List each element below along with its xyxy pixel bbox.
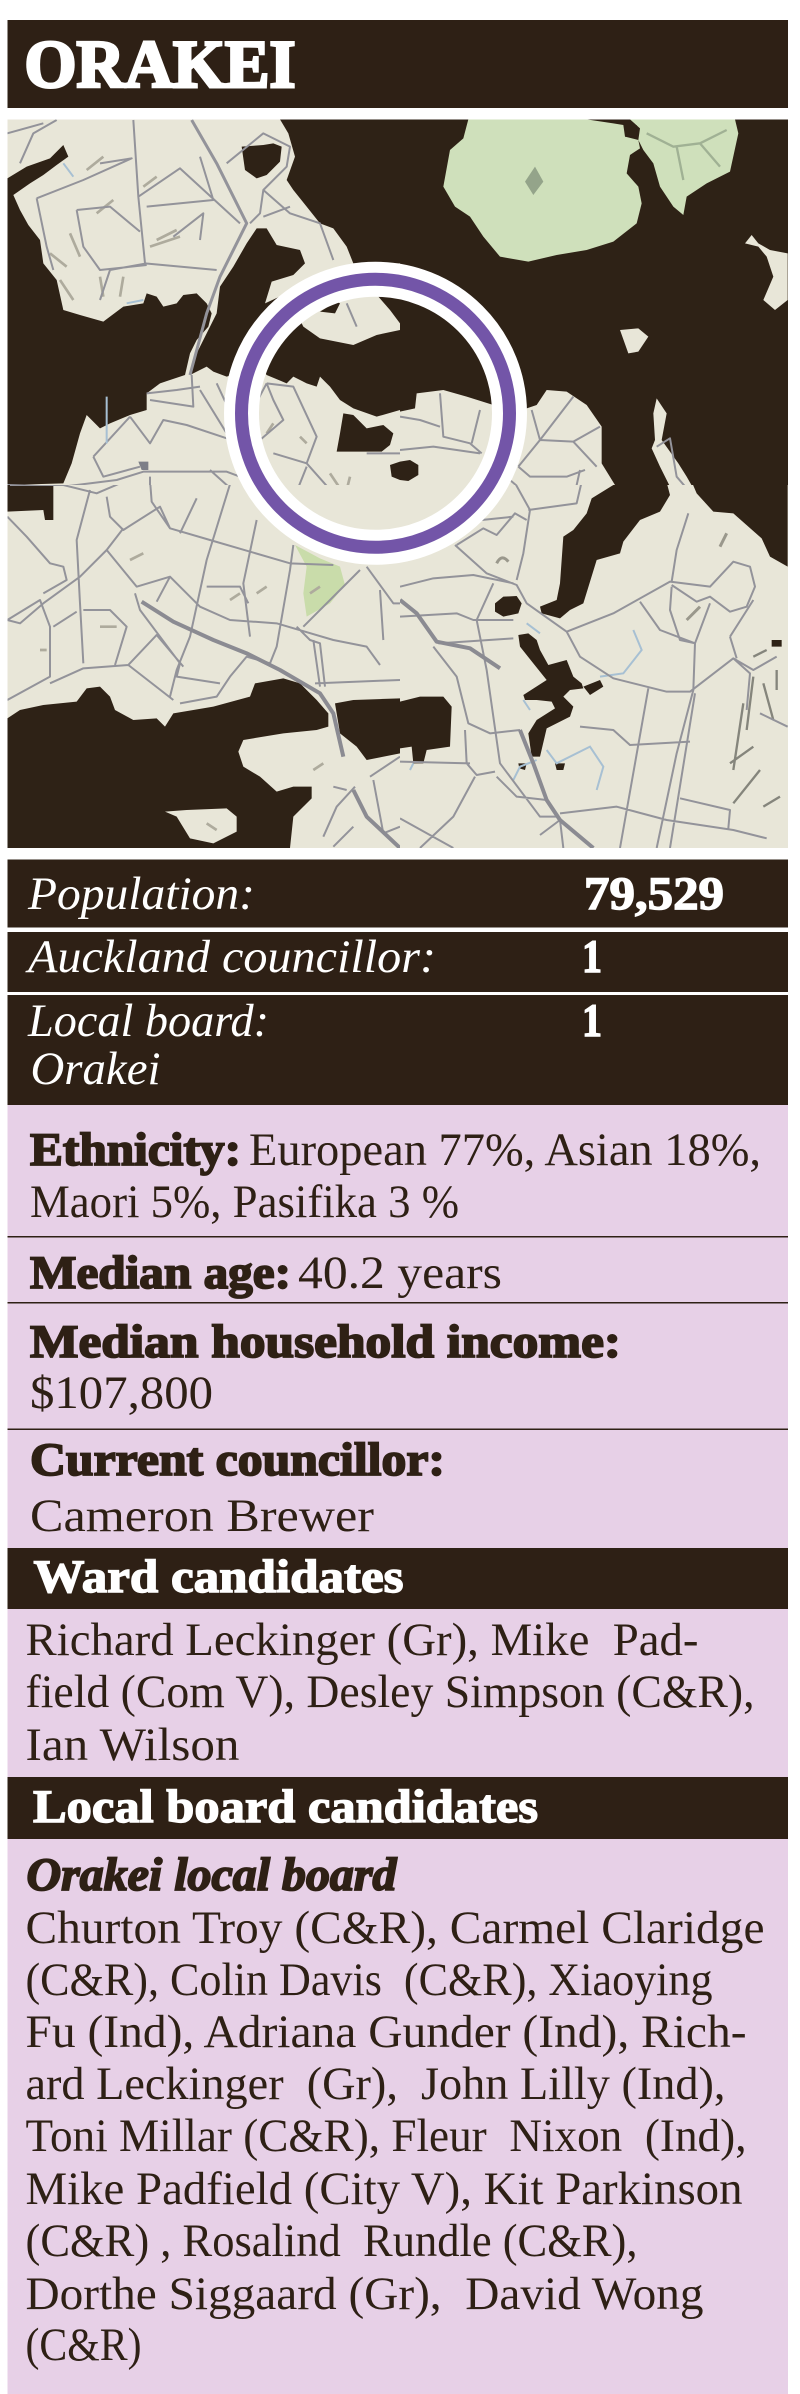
row: local board	[8, 995, 788, 1105]
local board candidates list	[8, 1839, 788, 2394]
median household income: Median household income:	[30, 1316, 621, 1368]
ethnicity: Ethnicity:	[30, 1124, 241, 1176]
row: local board: Local board:	[27, 995, 269, 1047]
map: north-east quadrant with islands	[400, 119, 788, 500]
candidate names: (C&R) , Rosalind Rundle (C&R),	[26, 2215, 638, 2267]
median age: Median age:	[30, 1247, 291, 1299]
median age: 40.2 years	[298, 1247, 502, 1299]
ward candidates list: field (Com V), Desley Simpson (C&R),	[26, 1666, 754, 1718]
row: population	[8, 860, 788, 928]
candidate names: ard Leckinger (Gr), John Lilly (Ind),	[26, 2058, 726, 2110]
ward candidates list: Richard Leckinger (Gr), Mike Pad-	[26, 1614, 698, 1666]
row: population: 79,529	[584, 868, 724, 920]
ethnicity: Maori 5%, Pasifika 3 %	[30, 1176, 459, 1228]
candidate names: (C&R)	[26, 2319, 142, 2371]
demographics panel background	[8, 1105, 788, 1548]
row: local board: Orakei	[30, 1043, 160, 1095]
candidate names	[26, 1902, 764, 2371]
row: Auckland councillor: Auckland councillor:	[25, 931, 436, 983]
candidate names: Toni Millar (C&R), Fleur Nixon (Ind),	[26, 2110, 746, 2162]
title text: ORAKEI	[24, 26, 296, 102]
row: local board: 1	[582, 995, 602, 1047]
median household income: $107,800	[30, 1367, 213, 1419]
heading: ward candidates	[8, 1548, 788, 1609]
map: south-east quadrant	[400, 470, 788, 848]
current councillor: Current councillor:	[30, 1434, 445, 1486]
subheading: Orakei local board: Orakei local board	[26, 1849, 398, 1901]
candidate names: Mike Padfield (City V), Kit Parkinson	[26, 2163, 742, 2215]
ethnicity	[30, 1124, 761, 1228]
candidate names: Fu (Ind), Adriana Gunder (Ind), Rich-	[26, 2006, 746, 2058]
stats panel	[8, 860, 788, 1548]
map: south-west quadrant	[7, 470, 400, 848]
current councillor	[30, 1434, 445, 1542]
heading: local board candidates: Local board candidates	[33, 1781, 538, 1833]
current councillor: Cameron Brewer	[30, 1490, 374, 1542]
candidate names: Dorthe Siggaard (Gr), David Wong	[26, 2268, 703, 2320]
row: Auckland councillor	[8, 931, 788, 992]
title banner	[8, 20, 788, 108]
ward candidates list	[8, 1609, 788, 1777]
row: Auckland councillor: 1	[582, 931, 602, 983]
row: population: Population:	[27, 868, 255, 920]
ethnicity: European 77%, Asian 18%,	[249, 1124, 761, 1176]
heading: ward candidates: Ward candidates	[34, 1551, 404, 1603]
map: locator ring	[242, 279, 510, 547]
median household income	[30, 1316, 621, 1419]
heading: local board candidates	[8, 1777, 788, 1839]
candidate names: Churton Troy (C&R), Carmel Claridge	[26, 1902, 764, 1954]
ward candidates list: Ian Wilson	[26, 1719, 240, 1771]
candidate names: (C&R), Colin Davis (C&R), Xiaoying	[26, 1954, 712, 2006]
map: north-west quadrant	[7, 119, 400, 500]
map of the Orakei ward	[7, 119, 788, 848]
median age	[30, 1247, 502, 1299]
